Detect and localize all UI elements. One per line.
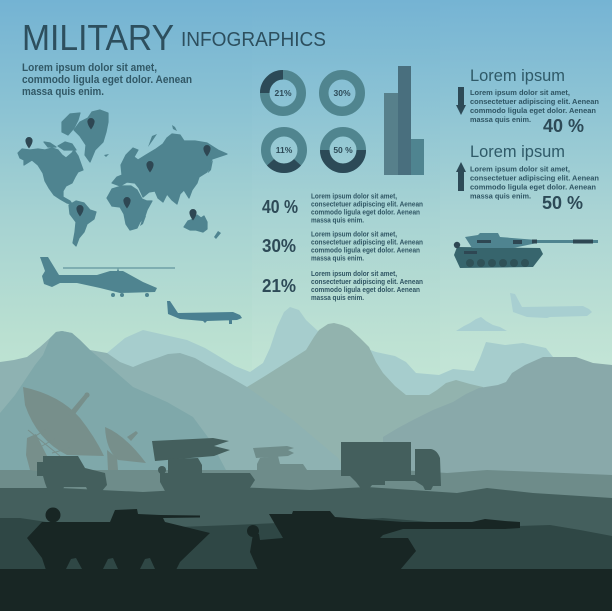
front left mountain xyxy=(0,331,227,480)
canadian arctic xyxy=(44,113,80,150)
stat row 40% xyxy=(262,192,423,224)
airplane xyxy=(167,301,242,324)
increase block xyxy=(456,142,599,213)
cloud xyxy=(456,317,507,331)
jeep xyxy=(37,456,107,491)
right column tint xyxy=(440,0,612,400)
donut chart 11%: 11% xyxy=(276,145,293,155)
barrel bands xyxy=(464,240,593,254)
donut chart 21%: 21% xyxy=(274,88,292,98)
truck xyxy=(341,442,441,490)
stat row 30%: massa quis enim. xyxy=(311,254,364,262)
intro text: commodo ligula eget dolor. Aenean xyxy=(22,74,192,86)
centre peak xyxy=(247,323,500,480)
eurasia xyxy=(112,134,227,204)
stat row 40%: commodo ligula eget dolor. Aenean xyxy=(311,208,420,216)
title: MILITARY xyxy=(22,17,174,58)
ground band 1 xyxy=(0,470,612,611)
small satellite dish xyxy=(105,427,146,470)
stat row 40%: massa quis enim. xyxy=(311,216,364,224)
armoured personnel carrier xyxy=(27,508,210,570)
faint airplane xyxy=(510,293,592,318)
world map xyxy=(18,110,227,246)
stat row 21%: 21% xyxy=(262,276,296,296)
stat row 21% xyxy=(262,269,423,302)
background rocket launcher xyxy=(253,446,307,472)
right mountain xyxy=(383,357,612,480)
stat row 40%: consectetuer adipiscing elit. Aenean xyxy=(311,200,423,208)
stat row 21%: commodo ligula eget dolor. Aenean xyxy=(311,285,420,294)
heading: Lorem ipsum xyxy=(470,142,565,161)
road wheels xyxy=(466,259,529,267)
location pins xyxy=(25,118,211,220)
value: 40 % xyxy=(543,116,584,136)
large satellite dish xyxy=(23,387,104,472)
intro text: Lorem ipsum dolor sit amet, xyxy=(22,62,157,74)
armoured personnel carrier wheel gaps xyxy=(66,558,155,569)
main battle tank xyxy=(454,233,598,268)
donut chart 30% xyxy=(324,75,360,111)
heavy tank xyxy=(247,511,520,570)
north america xyxy=(18,148,83,204)
rocket launcher xyxy=(152,438,255,491)
intro text: massa quis enim. xyxy=(22,86,104,98)
south america xyxy=(69,201,96,246)
hull xyxy=(454,247,543,268)
intro text xyxy=(22,62,192,98)
donut chart 50%: 50 % xyxy=(333,145,353,155)
stat row 30% xyxy=(262,230,423,262)
body text xyxy=(470,88,599,124)
body text: commodo ligula eget dolor. Aenean xyxy=(470,106,596,115)
icon: up arrow xyxy=(456,162,466,191)
body text: massa quis enim. xyxy=(470,115,531,124)
donut chart 50% xyxy=(325,132,361,168)
stat row 30%: Lorem ipsum dolor sit amet, xyxy=(311,230,397,238)
foreground ground xyxy=(0,569,612,611)
stat row 21%: consectetuer adipiscing elit. Aenean xyxy=(311,277,423,286)
helicopter xyxy=(40,257,175,297)
decrease block xyxy=(456,66,599,136)
islands xyxy=(104,125,221,239)
value: 50 % xyxy=(542,193,583,213)
body text: commodo ligula eget dolor. Aenean xyxy=(470,182,596,192)
body text: consectetuer adipiscing elit. Aenean xyxy=(470,97,599,106)
stat row 21%: Lorem ipsum dolor sit amet, xyxy=(311,269,397,278)
landscape xyxy=(0,307,612,611)
body text: consectetuer adipiscing elit. Aenean xyxy=(470,174,599,182)
donut chart 30%: 30% xyxy=(333,88,351,98)
title xyxy=(22,17,326,58)
stat row 21%: massa quis enim. xyxy=(311,293,364,302)
centre column tint xyxy=(252,0,440,400)
greenland xyxy=(74,110,108,162)
stat row 40%: 40 % xyxy=(262,197,298,217)
body text xyxy=(470,164,599,200)
ground band 2 xyxy=(0,487,612,611)
body text: massa quis enim. xyxy=(470,192,531,200)
ground band 3 xyxy=(0,518,612,611)
body text: Lorem ipsum dolor sit amet, xyxy=(470,164,570,174)
stat row 40%: Lorem ipsum dolor sit amet, xyxy=(311,192,397,200)
bar chart xyxy=(384,66,424,175)
donut chart 11% xyxy=(266,132,302,168)
australia xyxy=(184,215,207,232)
title: INFOGRAPHICS xyxy=(181,29,326,51)
stat row 30%: 30% xyxy=(262,236,296,256)
africa xyxy=(107,186,152,230)
stat row 30%: consectetuer adipiscing elit. Aenean xyxy=(311,238,423,246)
turret and barrel xyxy=(465,233,598,248)
heading: Lorem ipsum xyxy=(470,66,565,85)
far mountains xyxy=(107,307,560,420)
icon: down arrow xyxy=(456,87,466,115)
left mountain xyxy=(0,331,350,480)
hatch xyxy=(454,242,460,248)
donut chart 21% xyxy=(265,75,301,111)
stat row 30%: commodo ligula eget dolor. Aenean xyxy=(311,246,420,254)
body text: Lorem ipsum dolor sit amet, xyxy=(470,88,570,97)
